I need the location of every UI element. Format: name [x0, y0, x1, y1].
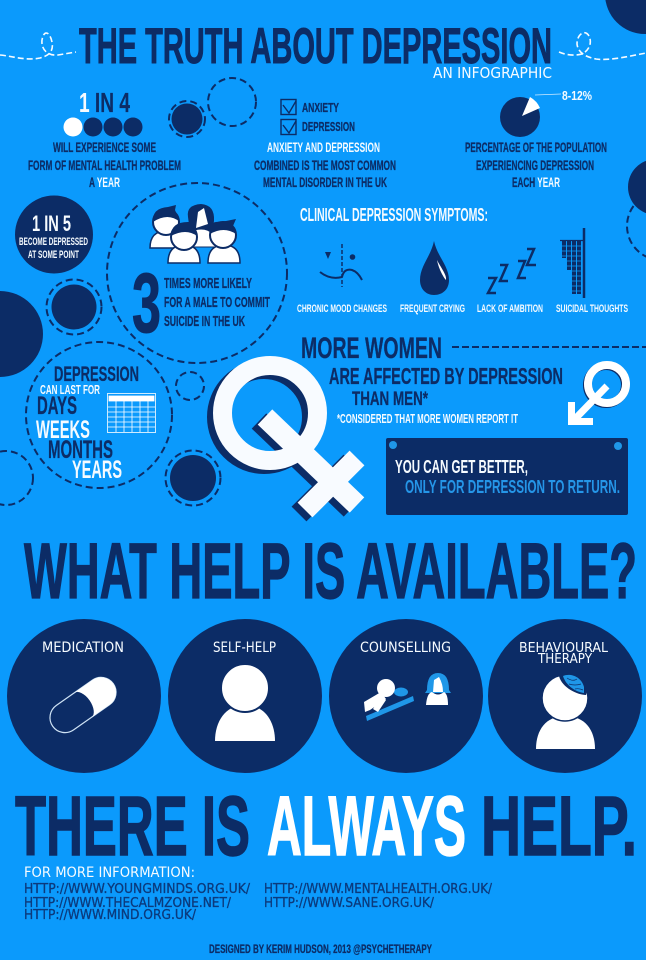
symptom labels: [297, 303, 628, 315]
panel: medication: [7, 619, 161, 773]
panel: behavioural therapy: THERAPY: [537, 652, 592, 667]
label: depression: DEPRESSION: [302, 119, 355, 134]
description: ANXIETY AND DEPRESSION: [267, 139, 380, 155]
links left column: [24, 882, 251, 923]
decorative right circle: [628, 159, 646, 215]
symptom labels: FREQUENT CRYING: [400, 303, 465, 315]
decorative circles top: [169, 78, 256, 137]
description: MENTAL DISORDER IN THE UK: [263, 174, 387, 190]
panel: behavioural therapy: [488, 619, 642, 773]
panel: self-help: SELF-HELP: [213, 640, 276, 656]
panel: 8-12 percent: [465, 88, 607, 190]
description: SUICIDE IN THE UK: [164, 313, 245, 330]
icon: calendar: [108, 394, 156, 432]
panel: counselling: [329, 619, 483, 773]
callout: you can get better: [386, 438, 628, 515]
description: [164, 275, 270, 330]
icon: zzz: [488, 249, 536, 293]
panel: more women: [301, 332, 646, 426]
panel: counselling: COUNSELLING: [360, 640, 451, 656]
links right column: HTTP://WWW.MENTALHEALTH.ORG.UK/: [264, 882, 493, 897]
icon: male symbol: [568, 365, 626, 425]
pie label: 8-12%: [562, 88, 592, 103]
panel: self-help: [168, 619, 322, 773]
heading: 1 in 4: 1 IN 4: [79, 87, 130, 118]
description: FORM OF MENTAL HEALTH PROBLEM: [28, 157, 181, 173]
icon: patient on couch: [364, 679, 414, 721]
footer credit: DESIGNED BY KERIM HUDSON, 2013 @PSYCHETHERAPY: [209, 942, 432, 956]
icon: person with brain: [536, 674, 595, 749]
description: TIMES MORE LIKELY: [164, 275, 252, 292]
icon: person: [215, 664, 275, 741]
decorative left large circle: [0, 291, 43, 377]
panel: more information: [24, 865, 493, 923]
decorative circle bottom: [166, 450, 220, 506]
description: [28, 139, 181, 190]
links left column: HTTP://WWW.YOUNGMINDS.ORG.UK/: [24, 882, 251, 897]
decorative corner circle: [605, 0, 646, 34]
heading: there is always help: [15, 779, 637, 873]
panel: behavioural therapy: BEHAVIOURAL: [519, 641, 609, 656]
icon: tall building: [560, 228, 585, 298]
four dots: [64, 118, 142, 136]
description: EACH YEAR: [512, 174, 560, 190]
symptom labels: LACK OF AMBITION: [477, 303, 543, 315]
panel: more women: MORE WOMEN: [301, 332, 442, 365]
icon: female symbol: [216, 366, 357, 514]
links right column: [264, 882, 493, 911]
panel: depression can last: DEPRESSION: [54, 363, 139, 386]
panel: 3 times more likely: [107, 183, 287, 363]
decorative small dashed circle: [176, 372, 204, 400]
description: WILL EXPERIENCE SOME: [53, 139, 156, 155]
subtitle: AN INFOGRAPHIC: [433, 64, 552, 82]
icon: pill: [44, 671, 122, 739]
checkbox: depression: [281, 120, 296, 134]
description: COMBINED IS THE MOST COMMON: [254, 157, 396, 173]
checkbox: anxiety: [281, 100, 296, 114]
symptom labels: CHRONIC MOOD CHANGES: [297, 303, 387, 315]
panel: 1 in 5: BECOME DEPRESSED: [19, 236, 88, 248]
decorative circle left: [46, 280, 102, 334]
panel: depression can last: CAN LAST FOR: [40, 382, 100, 397]
panel: anxiety and depression: [254, 100, 396, 190]
pie chart: [500, 94, 561, 137]
panel: depression can last: [26, 342, 172, 488]
panel: medication: MEDICATION: [42, 640, 124, 656]
links left column: HTTP://WWW.THECALMZONE.NET/: [24, 896, 232, 911]
callout: you can get better: YOU CAN GET BETTER,: [395, 457, 528, 477]
icon: counsellor: [425, 673, 451, 705]
panel: clinical depression symptoms: [297, 205, 628, 315]
panel: depression can last: YEARS: [72, 456, 122, 484]
panel: 1 in 5: [15, 196, 93, 274]
panel: 1 in 5: 1 IN 5: [32, 211, 71, 236]
panel: 1 in 5: AT SOME POINT: [28, 249, 79, 261]
heading: there is always help: THERE IS: [15, 779, 250, 873]
links right column: HTTP://WWW.SANE.ORG.UK/: [264, 896, 435, 911]
description: [254, 139, 396, 190]
panel: depression can last: MONTHS: [48, 436, 113, 464]
panel: depression can last: DAYS: [37, 392, 77, 420]
panel: more information: FOR MORE INFORMATION:: [24, 865, 195, 881]
label: anxiety: ANXIETY: [302, 100, 339, 115]
heading: there is always help: ALWAYS: [267, 779, 466, 873]
decorative right dashed circle: [627, 192, 646, 260]
panel: 1 in 4 statistic: [28, 87, 181, 190]
panel: more women: *CONSIDERED THAT MORE WOMEN REPORT IT: [337, 411, 518, 426]
description: [465, 139, 607, 190]
right title ornament: [559, 33, 646, 59]
big number 3: 3: [132, 256, 161, 350]
icon: group of people: [150, 204, 240, 263]
panel: depression can last: WEEKS: [36, 416, 90, 444]
icon: teardrop: [420, 241, 449, 295]
icon: split face: [320, 244, 362, 287]
links left column: HTTP://WWW.MIND.ORG.UK/: [24, 908, 197, 923]
panel: more women: THAN MEN*: [352, 389, 428, 410]
description: A YEAR: [89, 174, 120, 190]
heading: CLINICAL DEPRESSION SYMPTOMS:: [300, 205, 488, 225]
decorative left dashed circle: [0, 451, 33, 505]
left title ornament: [0, 33, 76, 59]
description: FOR A MALE TO COMMIT: [164, 294, 270, 311]
